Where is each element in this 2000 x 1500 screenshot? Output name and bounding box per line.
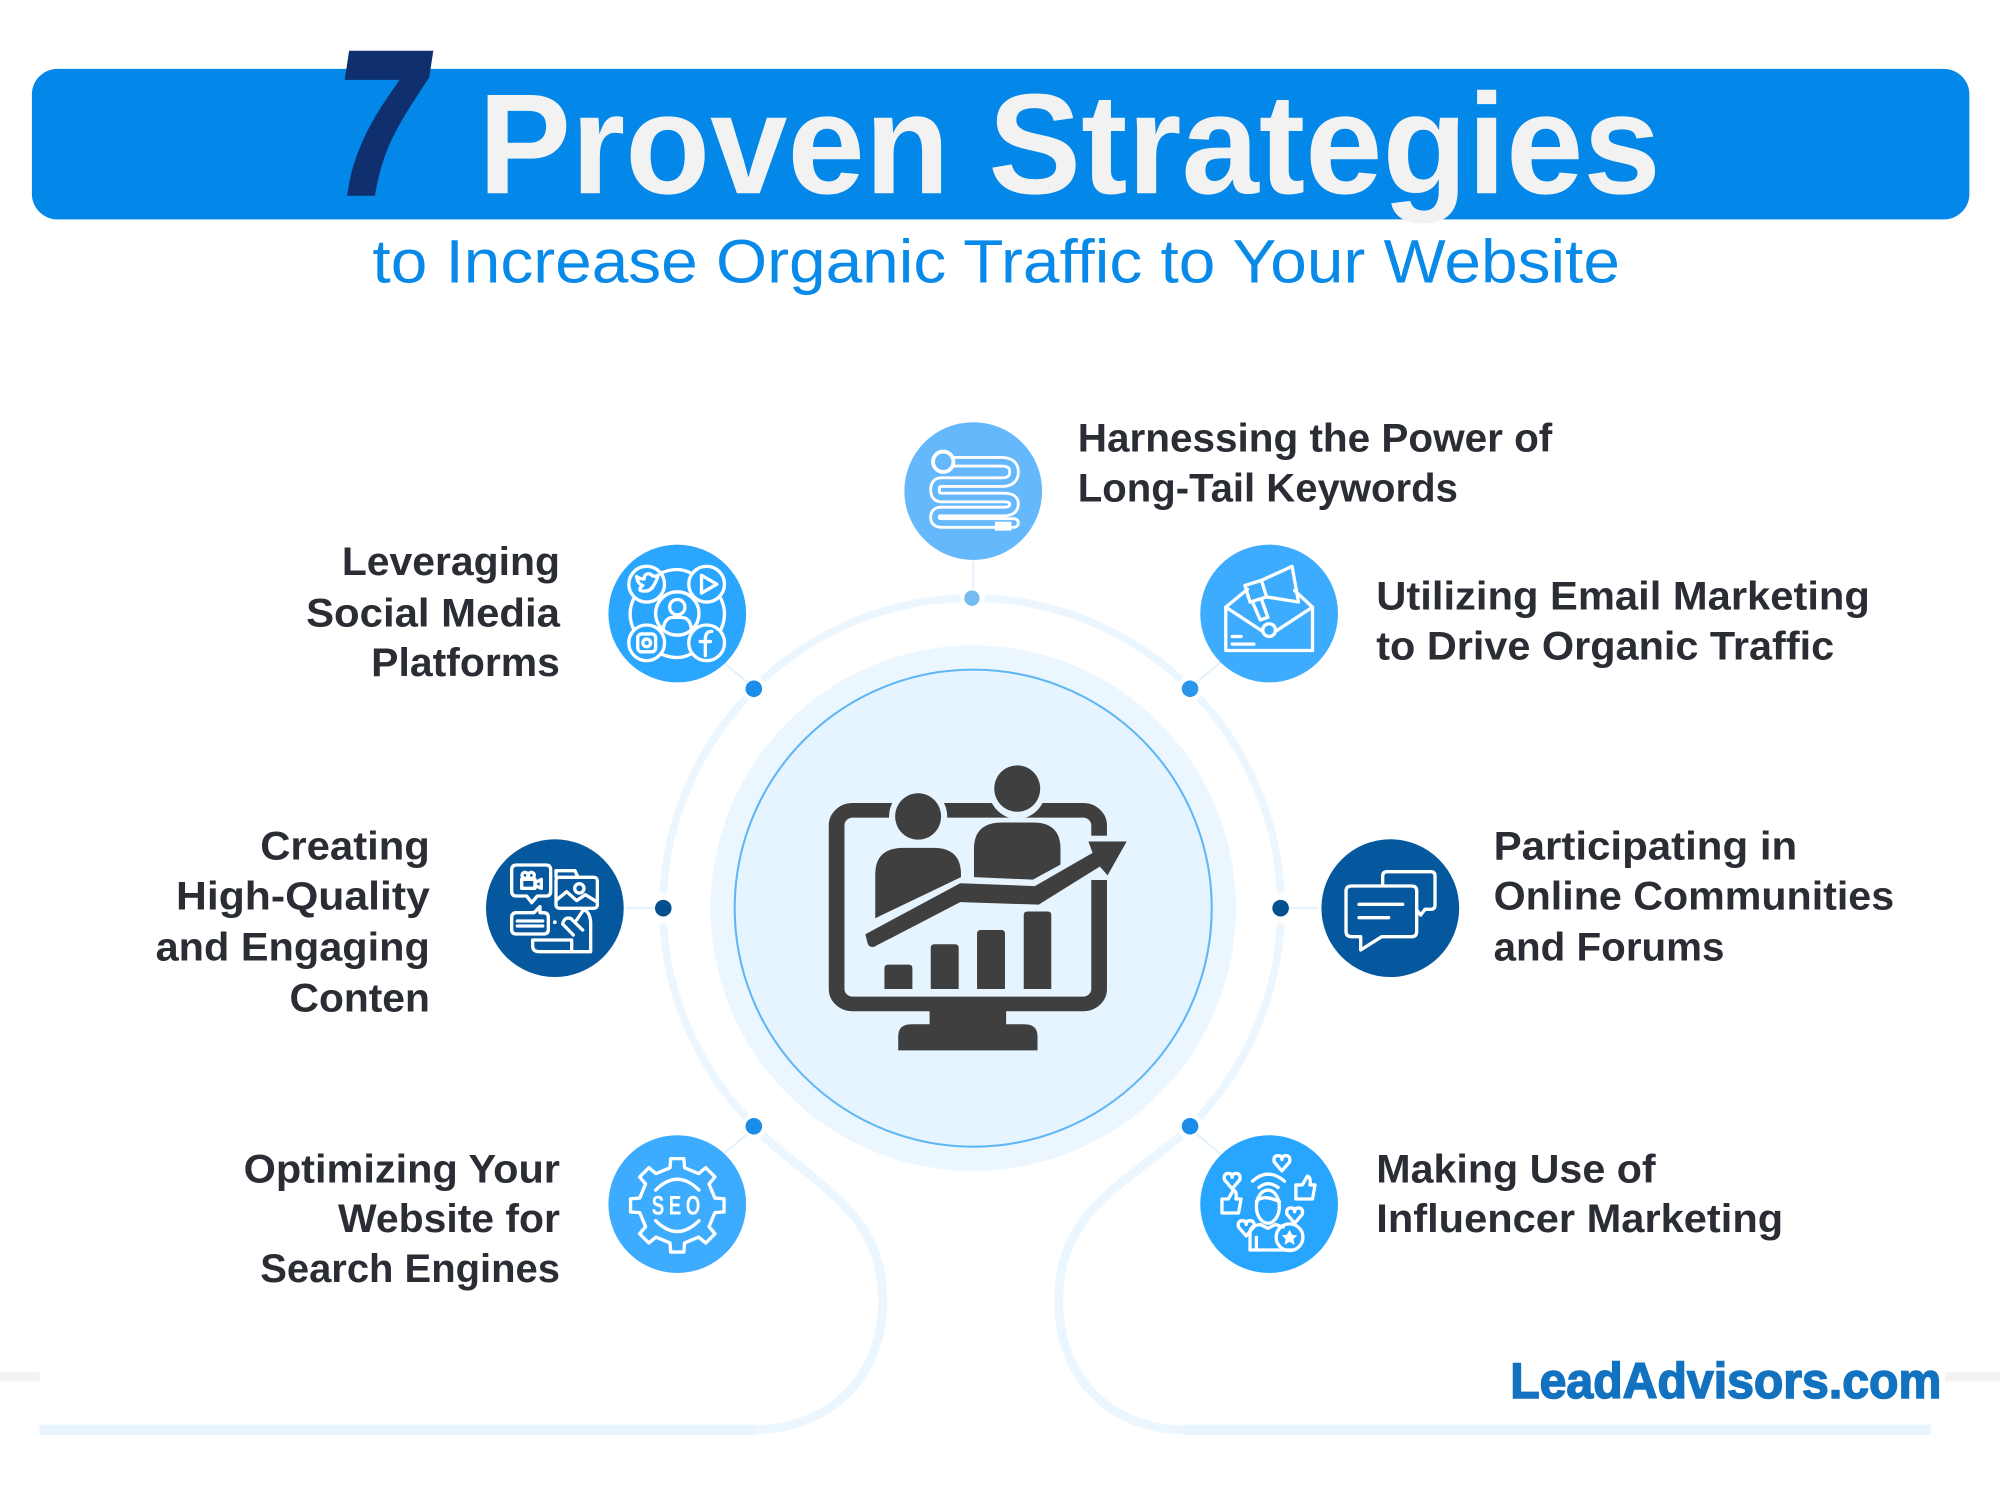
icon: influencer marketing [1200, 1135, 1338, 1273]
label: search engines: Search Engines [260, 1247, 560, 1291]
label: online communities [1494, 825, 1894, 969]
label: social media [306, 540, 561, 685]
label: long-tail keywords [1078, 417, 1553, 510]
label: search engines [244, 1147, 560, 1291]
central circle halo [710, 645, 1236, 1171]
label: influencer marketing [1376, 1147, 1783, 1241]
icon: email marketing [1200, 545, 1338, 682]
label: influencer marketing: Making Use of [1376, 1147, 1656, 1191]
label: email marketing: Utilizing Email Marketing [1376, 575, 1870, 619]
title numeral 7: 7 [337, 11, 431, 236]
label: online communities: Participating in [1494, 825, 1797, 869]
label: online communities: and Forums [1494, 925, 1724, 969]
header banner [32, 69, 1969, 219]
label: email marketing [1376, 575, 1870, 668]
central circle [735, 670, 1212, 1147]
label: social media: Leveraging [342, 540, 560, 584]
central icon: monitor with people and growth chart [837, 758, 1127, 1050]
label: search engines: Optimizing Your [244, 1147, 560, 1191]
label: content creation: Creating [260, 825, 430, 869]
label: content creation: Conten [290, 976, 430, 1020]
label: content creation [156, 825, 430, 1020]
icon: SEO gear [608, 1135, 746, 1273]
subtitle: to Increase Organic Traffic to Your Website [372, 228, 1620, 296]
icon: online communities [1321, 839, 1459, 977]
label: email marketing: to Drive Organic Traffic [1376, 624, 1834, 668]
icon: long-tail keywords [904, 422, 1042, 560]
label: long-tail keywords: Long-Tail Keywords [1078, 466, 1458, 510]
label: content creation: and Engaging [156, 925, 430, 969]
label: online communities: Online Communities [1494, 874, 1894, 918]
label: social media: Platforms [371, 641, 560, 685]
icon: content creation [486, 839, 624, 977]
label: social media: Social Media [306, 591, 561, 635]
title: Proven Strategies [478, 65, 1661, 224]
label: content creation: High-Quality [176, 874, 430, 918]
label: search engines: Website for [338, 1197, 560, 1241]
node dots [655, 591, 1289, 1135]
brand logo text: LeadAdvisors.com [1510, 1353, 1941, 1409]
icon: SEO gear: SEO [652, 1190, 705, 1220]
label: long-tail keywords: Harnessing the Power of [1078, 417, 1553, 461]
connector network [40, 561, 1931, 1430]
icon: social media [608, 545, 746, 682]
label: influencer marketing: Influencer Marketing [1376, 1197, 1783, 1241]
